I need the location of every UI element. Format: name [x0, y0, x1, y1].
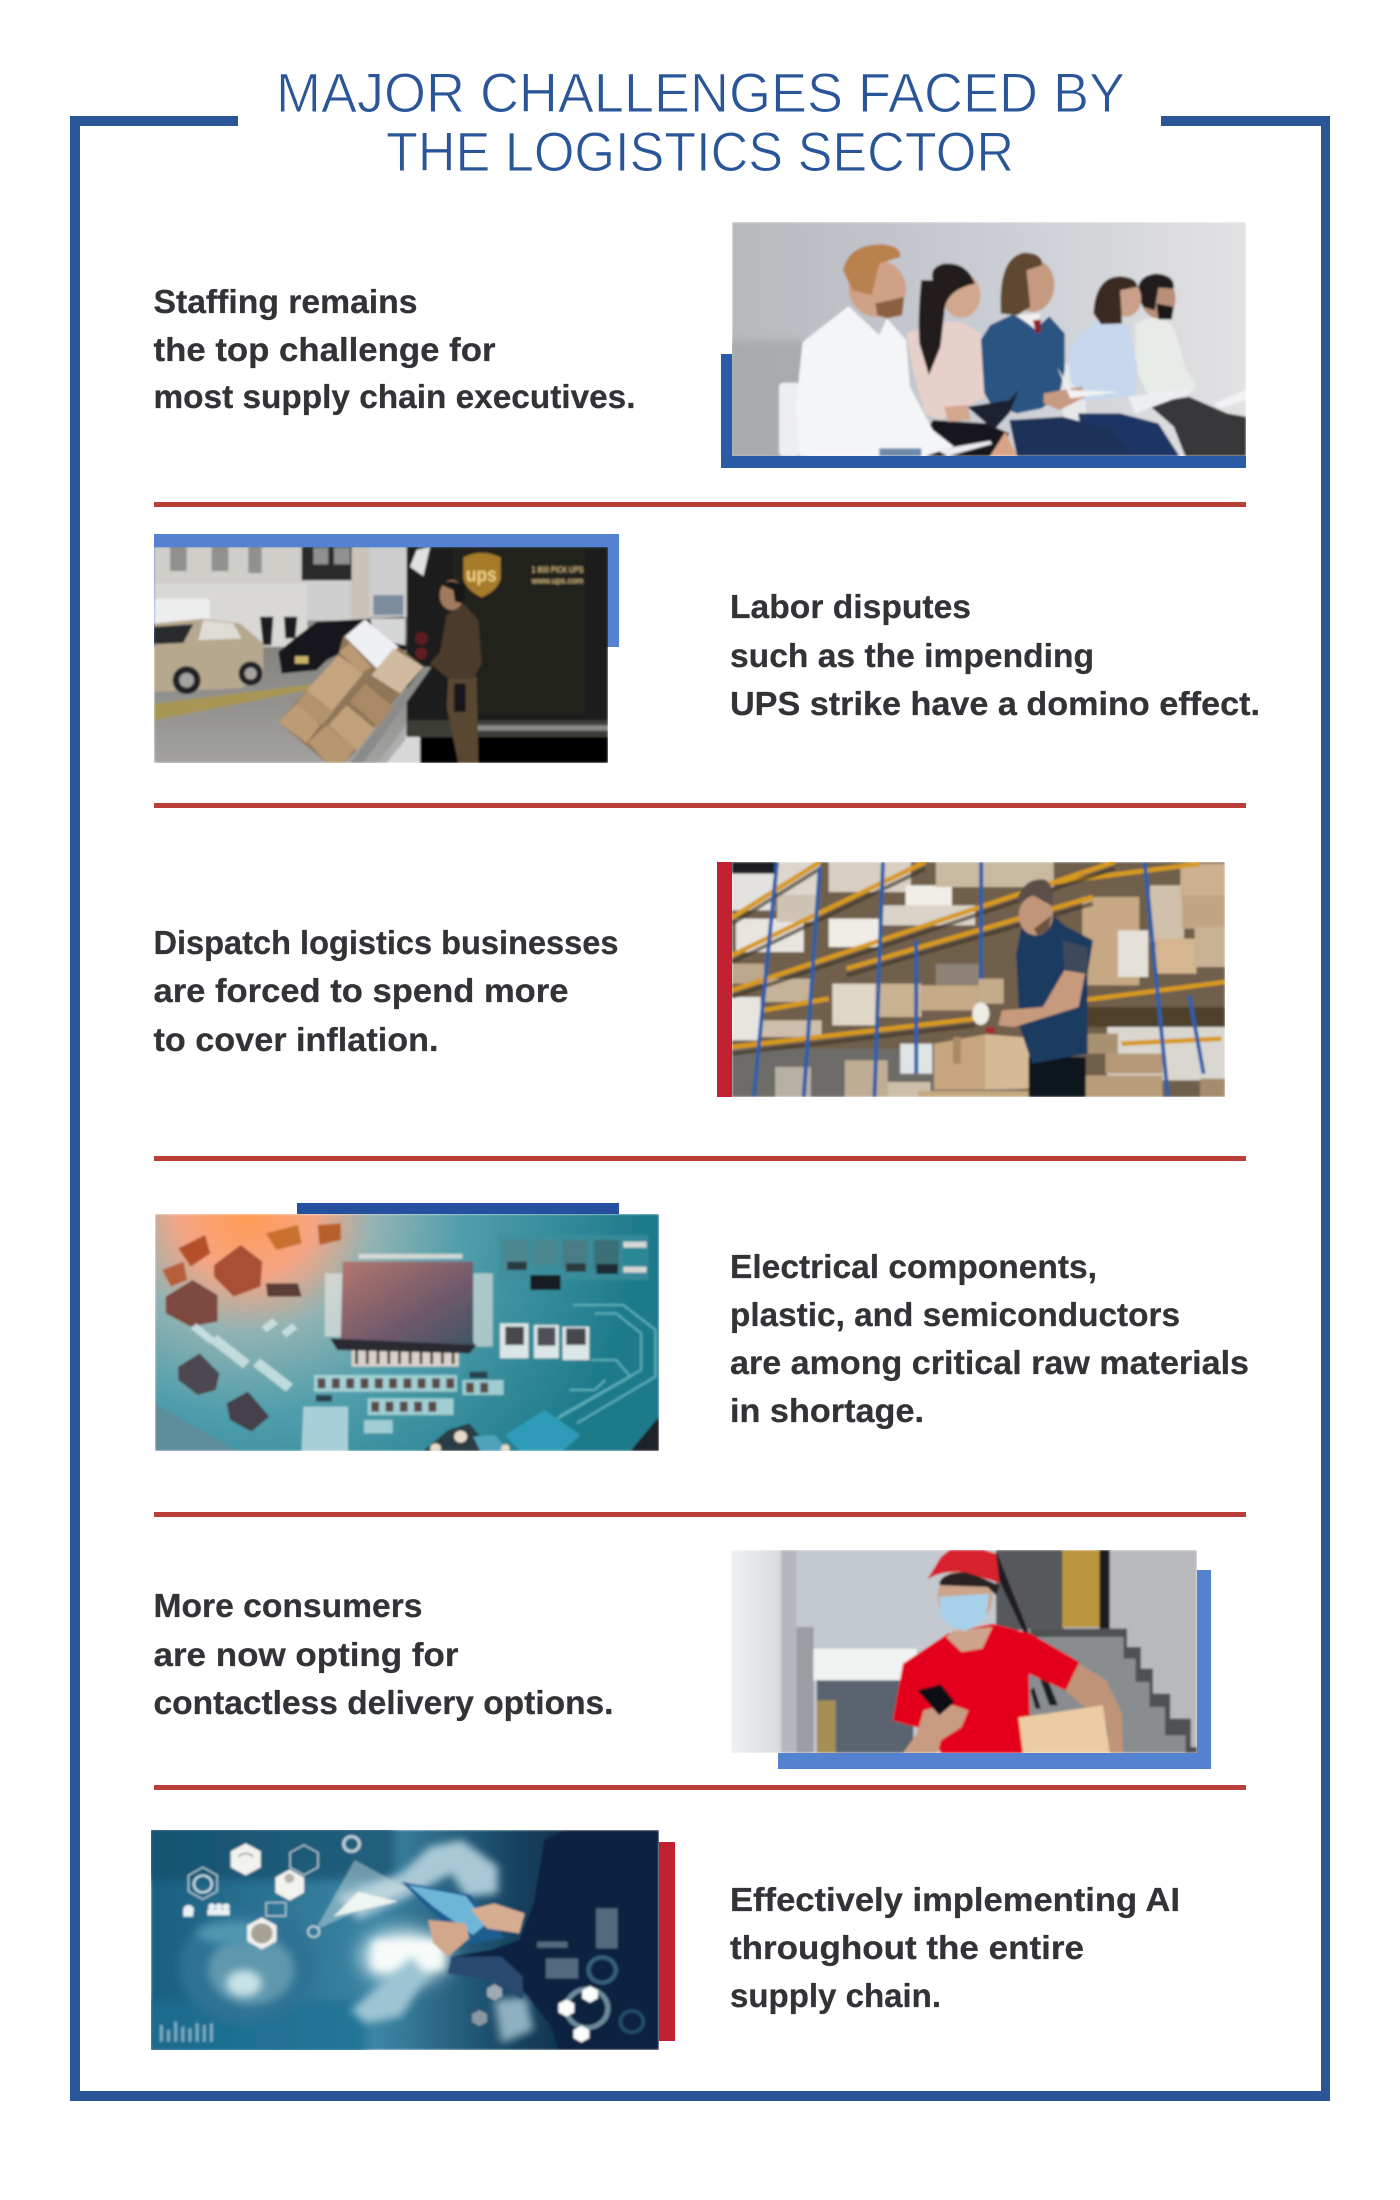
- text: staffing: [154, 283, 636, 415]
- worker: [1029, 1057, 1086, 1097]
- text: inflation: [154, 924, 618, 1058]
- accent: light blue block: [154, 534, 619, 647]
- text: labor disputes: UPS strike have a domino effect.: [730, 685, 1260, 722]
- person: [451, 1830, 659, 2050]
- tablet: [401, 1882, 505, 1943]
- text: staffing: Staffing remains: [154, 283, 418, 320]
- panel: inflation: [154, 862, 1225, 1097]
- accent: dark blue bar: [297, 1203, 619, 1214]
- left parts: [178, 1235, 210, 1267]
- text: AI implementation: throughout the entire: [730, 1929, 1084, 1966]
- divider 4: [154, 1512, 1246, 1517]
- divider 5: [154, 1785, 1246, 1790]
- photo: UPS worker with boxes: www.ups.com: [531, 575, 583, 585]
- title: [276, 61, 1125, 183]
- text: raw materials: plastic, and semiconductors: [730, 1296, 1180, 1333]
- cone of light: [315, 1860, 407, 1930]
- text: inflation: to cover inflation.: [154, 1021, 438, 1058]
- gears and white hexagons: [589, 1957, 616, 1983]
- hand and phone: [903, 1704, 968, 1753]
- divider 2: [154, 803, 1246, 808]
- divider 1: [154, 502, 1246, 507]
- lower parts: [314, 1375, 504, 1433]
- text: AI implementation: supply chain.: [730, 1977, 941, 2014]
- chip: [325, 1273, 343, 1337]
- boxes under man: [918, 1091, 1043, 1097]
- text: labor disputes: [730, 588, 1260, 722]
- face and mask: [937, 1569, 993, 1625]
- divider 3: [154, 1156, 1246, 1161]
- trolley and boxes: [350, 667, 432, 763]
- text: AI implementation: Effectively implementing AI: [730, 1881, 1180, 1918]
- text: contactless delivery: are now opting for: [154, 1636, 459, 1673]
- far right man: [1135, 315, 1197, 397]
- woman light blue shirt: [1069, 322, 1137, 400]
- text: raw materials: are among critical raw materials: [730, 1344, 1249, 1381]
- hands: [471, 1903, 525, 1933]
- man blue sweater: [981, 314, 1065, 413]
- text: staffing: the top challenge for: [154, 331, 496, 368]
- right parts: [498, 1235, 648, 1280]
- panel: staffing: [154, 222, 1246, 468]
- accent: light blue L shape: [778, 1570, 1211, 1769]
- photo: AI supply chain technology: [151, 1830, 659, 2050]
- shadow under beams: [732, 869, 1114, 1054]
- panel: AI implementation: [144, 1823, 1180, 2057]
- panel: labor disputes: [154, 534, 1260, 763]
- arm: [1065, 1664, 1123, 1753]
- accent: blue L shape: [721, 354, 1246, 468]
- title: THE LOGISTICS SECTOR: [386, 120, 1014, 183]
- title: MAJOR CHALLENGES FACED BY: [276, 61, 1125, 124]
- text: inflation: are forced to spend more: [154, 972, 568, 1009]
- text: labor disputes: Labor disputes: [730, 588, 971, 625]
- text: AI implementation: [730, 1881, 1180, 2014]
- photo: UPS worker with boxes: 1 800 PICK UPS: [532, 565, 584, 575]
- panel: contactless delivery: [154, 1550, 1211, 1769]
- accent: red bar: [659, 1842, 675, 2041]
- shelved goods: [732, 874, 775, 910]
- text: contactless delivery: [154, 1587, 614, 1721]
- photo: UPS worker with boxes: [154, 547, 608, 763]
- photo: UPS worker with boxes: ups: [466, 564, 497, 587]
- text: contactless delivery: contactless delivery options.: [154, 1684, 614, 1721]
- photo: circuit board: [155, 1214, 659, 1451]
- data icons: hexagons: [231, 1843, 261, 1875]
- box: [1018, 1705, 1110, 1753]
- accent: red bar: [717, 862, 732, 1097]
- yellow beams: [732, 862, 1225, 1047]
- photo: job candidates seated: [732, 222, 1246, 456]
- text: raw materials: in shortage.: [730, 1392, 924, 1429]
- photo: masked courier with phone and box: [731, 1550, 1197, 1753]
- woman pink shirt: [906, 322, 984, 420]
- worker: [447, 677, 478, 763]
- small bars chart: [160, 2022, 213, 2042]
- man white shirt: [796, 306, 954, 456]
- blue uprights: [754, 862, 1204, 1097]
- text: raw materials: Electrical components,: [730, 1248, 1097, 1285]
- stairs: [1027, 1629, 1191, 1753]
- text: inflation: Dispatch logistics businesses: [154, 924, 618, 961]
- text: raw materials: [730, 1248, 1249, 1429]
- panel: raw materials: [155, 1203, 1249, 1453]
- text: contactless delivery: More consumers: [154, 1587, 422, 1624]
- tee: [893, 1624, 1079, 1753]
- robot arm and glow: [337, 1840, 498, 1920]
- text: labor disputes: such as the impending: [730, 637, 1094, 674]
- text: staffing: most supply chain executives.: [154, 378, 636, 415]
- photo: warehouse worker: [732, 862, 1225, 1097]
